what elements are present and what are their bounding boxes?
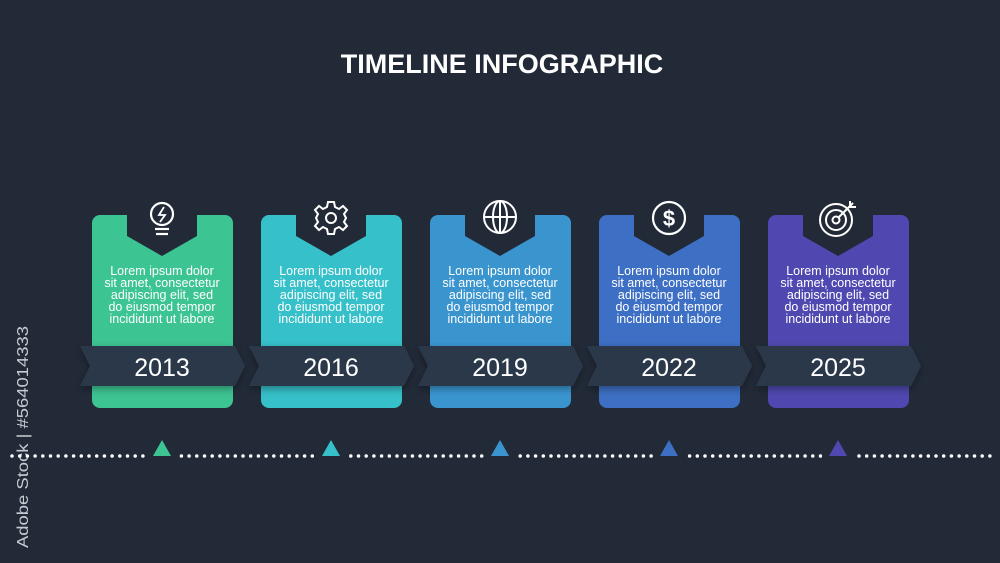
- icon: gear: [315, 202, 347, 234]
- card 2016: incididunt ut labore: [279, 312, 384, 326]
- card 2022: incididunt ut labore: [617, 312, 722, 326]
- dotted timeline: [12, 454, 992, 458]
- text: do eiusmod tempor: [108, 300, 216, 314]
- card 2013: [80, 203, 245, 408]
- card 2022: [587, 202, 752, 408]
- card 2016: sit amet, consectetur: [273, 276, 389, 290]
- notch: [127, 214, 197, 256]
- icon: target: [820, 201, 856, 236]
- text: sit amet, consectetur: [104, 276, 220, 290]
- icon: dollar: [653, 202, 685, 234]
- card 2022: adipiscing elit, sed: [618, 288, 720, 302]
- card 2016: do eiusmod tempor: [277, 300, 385, 314]
- card 2025: sit amet, consectetur: [780, 276, 896, 290]
- card 2022: Lorem ipsum dolor: [617, 264, 721, 278]
- card 2016: Lorem ipsum dolor: [279, 264, 383, 278]
- triangle 2016: [322, 440, 340, 456]
- icon: lightbulb: [151, 203, 173, 234]
- card 2022: 2022: [641, 354, 697, 382]
- text: Lorem ipsum dolor: [110, 264, 214, 278]
- text: incididunt ut labore: [110, 312, 215, 326]
- card 2019: sit amet, consectetur: [442, 276, 558, 290]
- card 2019: [418, 201, 583, 408]
- card 2025: do eiusmod tempor: [784, 300, 892, 314]
- card 2019: do eiusmod tempor: [446, 300, 554, 314]
- title: TIMELINE INFOGRAPHIC: [341, 49, 663, 79]
- triangle 2013: [153, 440, 171, 456]
- watermark id: Adobe Stock | #564014333: [15, 326, 32, 548]
- card 2016: 2016: [303, 354, 359, 382]
- text: [104, 264, 220, 326]
- card 2019: incididunt ut labore: [448, 312, 553, 326]
- card 2019: adipiscing elit, sed: [449, 288, 551, 302]
- icon: globe: [484, 201, 516, 233]
- card 2013: 2013: [134, 354, 190, 382]
- card 2016: adipiscing elit, sed: [280, 288, 382, 302]
- triangle 2022: [660, 440, 678, 456]
- icon: dollar: $: [663, 206, 675, 231]
- card 2022: sit amet, consectetur: [611, 276, 727, 290]
- triangle 2025: [829, 440, 847, 456]
- triangle 2019: [491, 440, 509, 456]
- card 2025: Lorem ipsum dolor: [786, 264, 890, 278]
- card 2019: 2019: [472, 354, 528, 382]
- card 2025: [756, 201, 921, 408]
- card 2019: Lorem ipsum dolor: [448, 264, 552, 278]
- ribbon: [80, 346, 245, 386]
- card 2022: do eiusmod tempor: [615, 300, 723, 314]
- card 2016: [249, 202, 414, 408]
- card 2025: adipiscing elit, sed: [787, 288, 889, 302]
- card 2025: incididunt ut labore: [786, 312, 891, 326]
- card 2025: 2025: [810, 354, 866, 382]
- text: adipiscing elit, sed: [111, 288, 213, 302]
